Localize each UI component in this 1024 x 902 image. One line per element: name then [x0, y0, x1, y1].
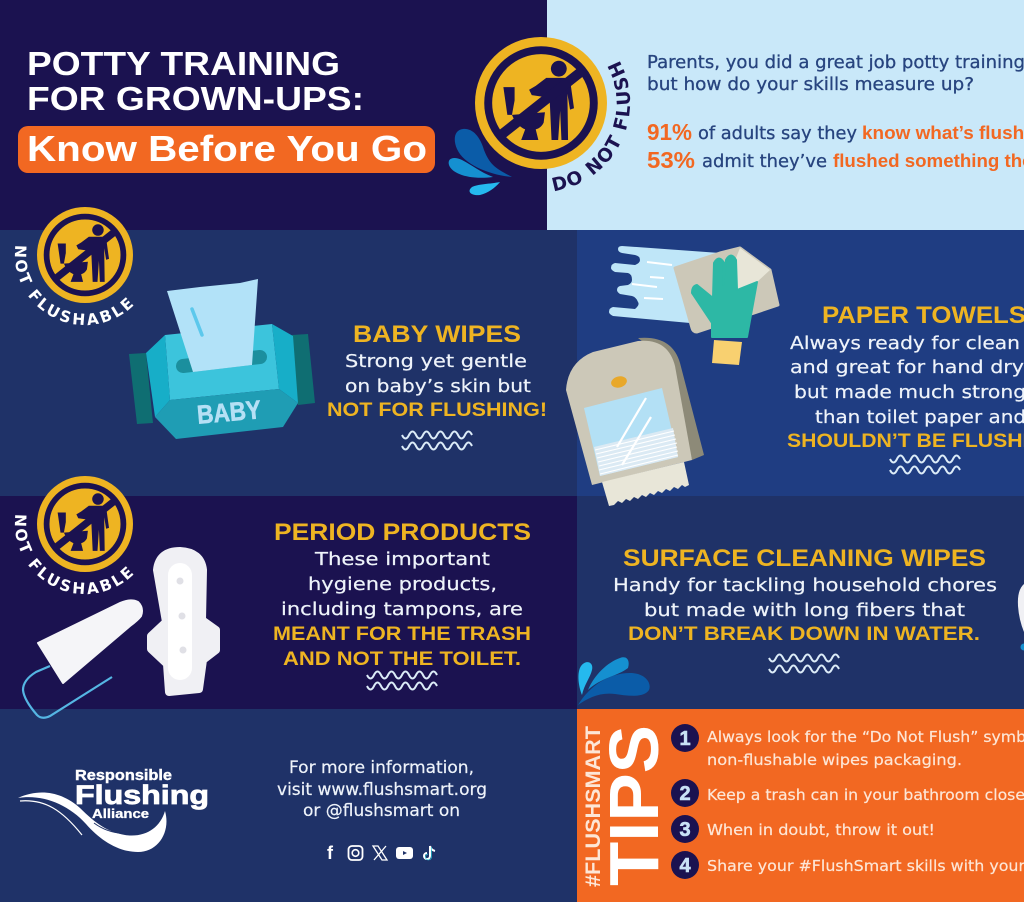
- tip 4: Share your #FlushSmart skills with your: [707, 857, 1024, 875]
- panel: baby wipes: [0, 230, 577, 496]
- text block: period products: AND NOT THE TOILET.: [283, 648, 521, 670]
- intro text: Parents, you did a great job potty training: [647, 52, 1024, 73]
- text block: paper towels: PAPER TOWELS: [822, 302, 1024, 329]
- text block: more information: visit www.flushsmart.org: [277, 780, 487, 799]
- panel: paper towels: [577, 230, 1024, 496]
- tip 1: 1: [679, 728, 691, 750]
- statistics: 91%: [647, 119, 692, 145]
- text block: period products: [273, 519, 531, 670]
- tip 2: [671, 779, 1024, 807]
- logo: responsible flushing alliance: Flushing: [75, 780, 209, 810]
- logo: responsible flushing alliance: Responsible: [75, 768, 172, 784]
- icon: not flushable badge 2: NOT FLUSHABLE: [14, 515, 134, 594]
- title: POTTY TRAINING: [27, 46, 340, 83]
- text block: paper towels: Always ready for clean: [790, 333, 1020, 354]
- tip 4: 4: [679, 855, 691, 877]
- text block: paper towels: and great for hand drying: [790, 357, 1024, 378]
- panel: surface cleaning wipes: [577, 496, 1024, 709]
- panel: period products: [0, 496, 577, 709]
- tip 1: non-flushable wipes packaging.: [707, 751, 962, 769]
- panel: tips: [577, 709, 1024, 902]
- tip 3: 3: [679, 819, 691, 841]
- icon: paper towel dispenser: [566, 338, 704, 506]
- tips heading: TIPS: [595, 725, 673, 886]
- text block: surface cleaning wipes: Handy for tackling household chores: [613, 575, 997, 596]
- icon: bottom splash: [578, 657, 650, 705]
- statistics: [647, 119, 1024, 173]
- icon: wave 2: [890, 456, 960, 474]
- title: [27, 46, 364, 118]
- tips heading: #FLUSHSMART: [582, 726, 605, 887]
- tip 3: When in doubt, throw it out!: [707, 821, 935, 839]
- icon: wave 1: [402, 432, 472, 450]
- icon: baby wipes package: [129, 279, 315, 439]
- text block: surface cleaning wipes: SURFACE CLEANING WIPES: [623, 545, 986, 572]
- text block: period products: MEANT FOR THE TRASH: [273, 623, 531, 645]
- tip 3: [671, 815, 935, 843]
- text block: period products: including tampons, are: [281, 599, 523, 620]
- intro text: but how do your skills measure up?: [647, 74, 974, 95]
- statistics: of adults say they: [698, 123, 857, 144]
- statistics: 53%: [647, 147, 695, 173]
- icons: social media: [327, 843, 435, 863]
- tip 2: 2: [679, 783, 691, 805]
- statistics: admit they’ve: [702, 151, 827, 172]
- icon: wipe edge at right: [1018, 584, 1024, 650]
- text block: baby wipes: NOT FOR FLUSHING!: [327, 399, 547, 421]
- text block: period products: PERIOD PRODUCTS: [274, 519, 531, 546]
- icon: not flushable badge 1: NOT FLUSHABLE: [14, 246, 134, 326]
- text block: more information: For more information,: [289, 758, 474, 777]
- icon: do not flush badge: [475, 37, 630, 192]
- panel: footer: [0, 709, 577, 902]
- subtitle pill: Know Before You Go: [27, 128, 427, 169]
- icon: wave 3: [367, 672, 437, 690]
- icon: baby wipes package: BABY: [196, 394, 262, 430]
- text block: baby wipes: on baby’s skin but: [345, 376, 531, 397]
- title: FOR GROWN-UPS:: [27, 81, 364, 118]
- icon: top splash: [449, 129, 512, 195]
- icon: pad: [151, 551, 216, 692]
- intro text: [647, 52, 1024, 95]
- text block: paper towels: [787, 302, 1024, 452]
- tip 1: [671, 724, 1024, 769]
- text block: period products: hygiene products,: [308, 574, 497, 595]
- text block: more information: [277, 758, 487, 820]
- tip 2: Keep a trash can in your bathroom close: [707, 786, 1024, 804]
- panel: header right: [547, 0, 1024, 230]
- icons: social media: f: [327, 843, 334, 863]
- text block: surface cleaning wipes: [613, 545, 997, 645]
- text block: baby wipes: Strong yet gentle: [345, 351, 527, 372]
- icon: wave 4: [769, 654, 839, 672]
- icon: do not flush badge: DO NOT FLUSH: [552, 61, 630, 192]
- text block: more information: or @flushsmart on: [303, 801, 460, 820]
- text block: baby wipes: [327, 321, 547, 421]
- text block: paper towels: SHOULDN’T BE FLUSHED: [787, 430, 1024, 452]
- text block: paper towels: than toilet paper and: [815, 407, 1024, 428]
- logo: responsible flushing alliance: [18, 768, 209, 852]
- text block: surface cleaning wipes: but made with long fibers that: [644, 600, 965, 621]
- text block: paper towels: but made much stronger: [794, 382, 1024, 403]
- icon: hand wiping with paper towel: [609, 246, 778, 365]
- icon: not flushable badge 1: [14, 207, 134, 326]
- logo: responsible flushing alliance: Alliance: [92, 807, 149, 821]
- text block: surface cleaning wipes: DON’T BREAK DOWN IN WATER.: [628, 623, 980, 645]
- icon: tampon: [23, 600, 142, 718]
- icon: not flushable badge 2: [14, 476, 134, 594]
- text block: period products: These important: [314, 549, 490, 570]
- tip 4: [671, 851, 1024, 879]
- panel: header left: [0, 0, 547, 230]
- text block: baby wipes: BABY WIPES: [353, 321, 521, 348]
